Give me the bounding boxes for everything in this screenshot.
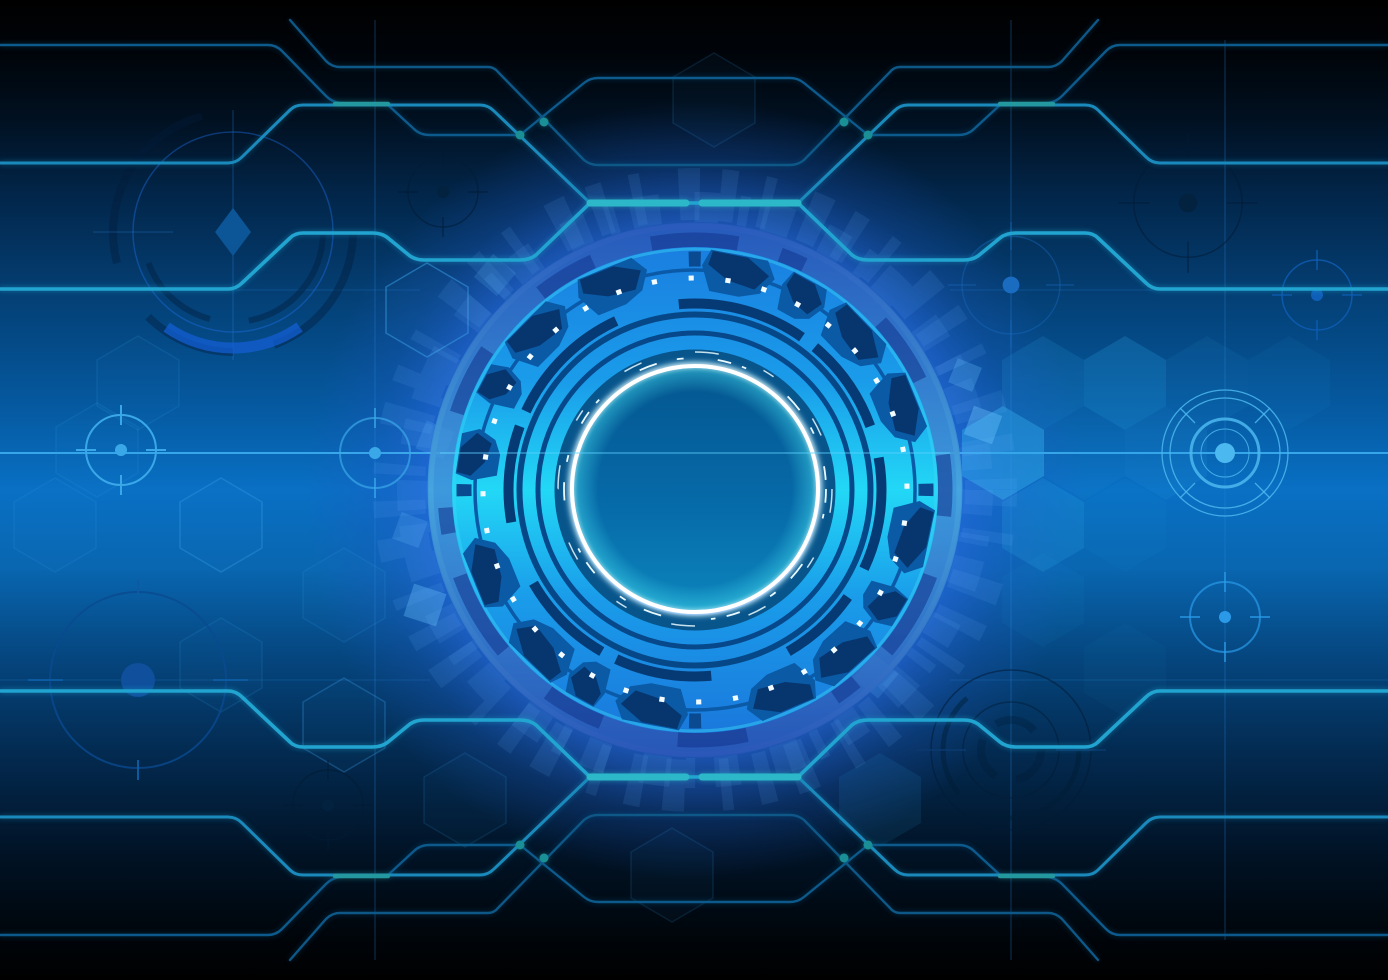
target: middle left [76, 405, 166, 495]
gear ring outer rim [454, 249, 936, 731]
tech dial: upper left [93, 112, 353, 352]
target: middle centre left [330, 408, 420, 498]
gear teeth: upper right quadrant [697, 249, 931, 451]
hexagon pattern: left [14, 53, 755, 922]
dark inner band [562, 357, 828, 623]
tech dial: lower left [28, 580, 248, 780]
halo ring [440, 235, 950, 745]
thin dark ring [538, 333, 852, 647]
white square markers [483, 278, 907, 702]
translucent square chips [392, 254, 1002, 699]
bright bands under inner rings [530, 325, 860, 655]
central blue glow [305, 100, 1085, 880]
halo ring dark panels [445, 240, 945, 740]
dark ring [520, 314, 870, 666]
radial light bars around the core [399, 194, 991, 786]
thin white dashes outer [558, 352, 832, 626]
circuit lines: lower [0, 691, 1388, 960]
gear teeth: upper left quadrant [455, 254, 656, 484]
gear ring small notches [464, 259, 926, 721]
target: lower right [1180, 572, 1270, 662]
gear teeth: lower left quadrant [459, 529, 693, 731]
target: upper centre left [398, 147, 488, 237]
disc inner edge glow [574, 368, 816, 610]
target: upper right [1118, 133, 1258, 273]
white ring glow [572, 366, 818, 612]
white ring core [572, 366, 818, 612]
glow behind white ring [572, 366, 818, 612]
thin white dashes [564, 358, 826, 620]
gear teeth: lower right quadrant [737, 496, 936, 725]
concentric target: right [1162, 390, 1288, 516]
hexagon pattern: right [839, 336, 1330, 847]
horizontal light line across core [440, 452, 950, 454]
central disc [574, 368, 816, 610]
halo ring outer rim [431, 226, 959, 754]
central HUD core [431, 226, 959, 754]
gear ring dark groove [475, 270, 915, 710]
gear ring base [478, 273, 912, 707]
circuit lines: upper [0, 20, 1388, 289]
tech dial: lower right [916, 670, 1106, 830]
target: right side [1272, 250, 1362, 340]
segmented dark band [508, 304, 882, 676]
target: faint upper centre right [948, 222, 1074, 348]
target: lower left [283, 760, 373, 850]
